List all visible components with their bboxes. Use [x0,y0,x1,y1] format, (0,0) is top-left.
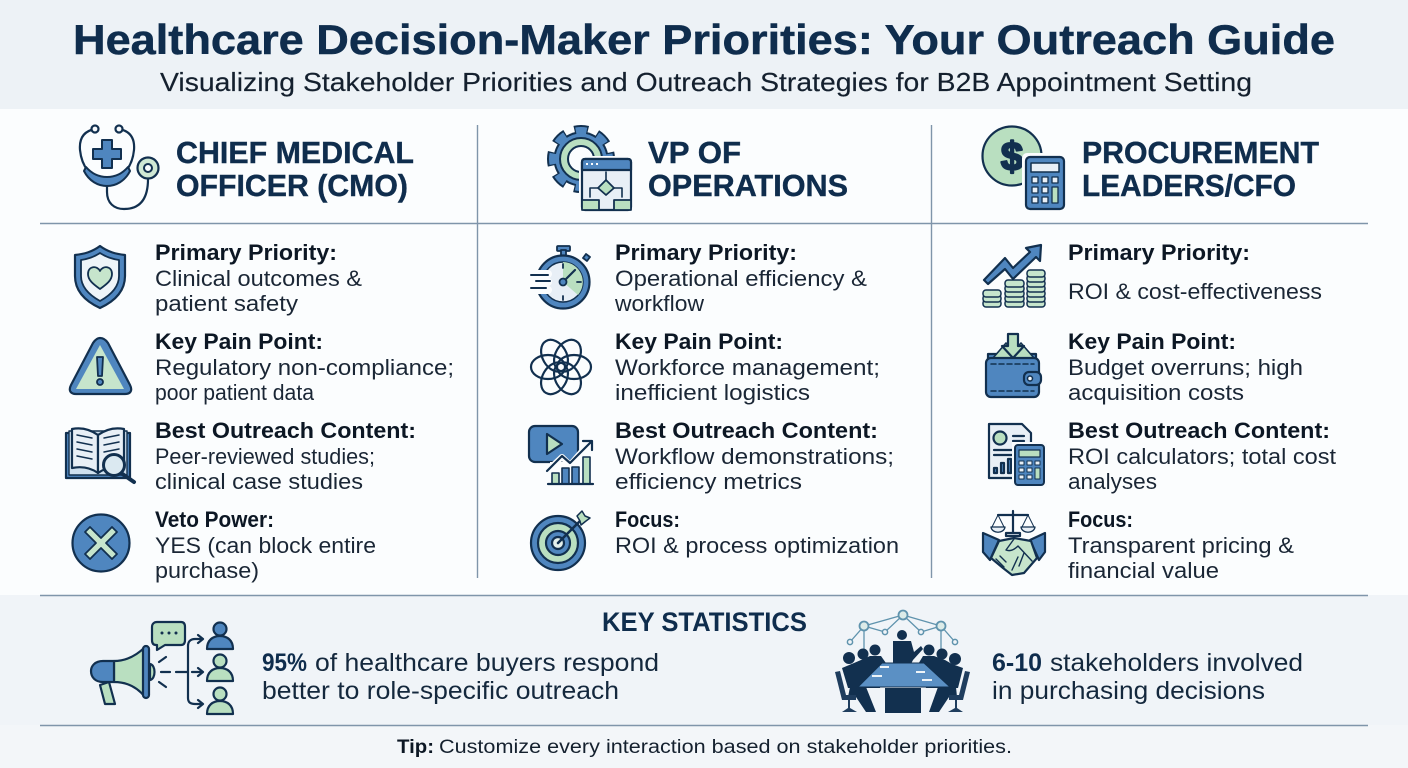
text: best outreach content [615,418,894,494]
text: key pain point: Key Pain Point: [1068,329,1236,354]
heading: procurement leaders / CFO: LEADERS/CFO [1082,168,1296,203]
stat: stakeholders: 6-10 [992,649,1042,677]
subtitle: Visualizing Stakeholder Priorities and Outreach Strategies for B2B Appointment Setting [160,67,1252,97]
panel: key statistics [91,607,1303,714]
text: key pain point: acquisition costs [1068,380,1244,405]
text: primary priority: Primary Priority: [615,240,797,265]
text: best outreach content [155,418,416,494]
text: veto power: YES (can block entire [155,533,376,558]
icon: stethoscope [80,126,158,209]
icon: boardroom meeting [835,610,970,713]
text: key pain point: Budget overruns; high [1068,355,1303,380]
stat: stakeholders: stakeholders involved [1050,649,1303,677]
icon: target [531,511,590,570]
text: primary priority: Primary Priority: [1068,240,1250,265]
icon: gear and workflow window [553,131,634,213]
text: best outreach content [1068,418,1337,494]
text: key pain point: inefficient logistics [615,380,810,405]
text: primary priority: Operational efficiency & [615,266,867,291]
tip: Customize every interaction based on stakeholder priorities. [439,737,1012,758]
text: key pain point: Regulatory non-compliance; [155,355,454,380]
heading: CMO: CHIEF MEDICAL [176,135,414,170]
icon: veto cross [72,514,130,572]
text: focus: Focus: [615,507,680,532]
icon: report and calculator [989,424,1047,488]
text: primary priority: workflow [614,291,705,316]
text: primary priority [614,240,867,316]
icon: megaphone to stakeholders [91,622,233,714]
heading: VP of Operations: VP OF [648,135,741,170]
text: key pain point: Key Pain Point: [615,329,783,354]
text: best outreach content: Peer-reviewed studies; [155,444,375,469]
text: veto power: Veto Power: [155,507,274,532]
heading: procurement leaders / CFO [1082,135,1319,203]
text: best outreach content: Best Outreach Content: [155,418,416,443]
text: best outreach content: Workflow demonstrations; [615,444,894,469]
text: key pain point [1068,329,1303,405]
icon: wallet [986,334,1041,397]
title: Healthcare Decision-Maker Priorities: Your Outreach Guide [73,16,1335,63]
text: key pain point [155,329,454,405]
header band [0,0,1408,109]
heading: procurement leaders / CFO: PROCUREMENT [1082,135,1319,170]
panel: procurement leaders [982,126,1337,583]
panel: chief medical officer [66,126,454,583]
icon: dollar and calculator: $ [1001,135,1023,179]
heading: VP of Operations [648,135,848,203]
heading: CMO: OFFICER (CMO) [176,168,408,203]
text: key pain point [615,329,880,405]
text: best outreach content: Best Outreach Content: [615,418,878,443]
text: best outreach content: efficiency metrics [615,469,802,494]
text: focus: Transparent pricing & [1068,533,1294,558]
icon: book and magnifier [66,428,134,482]
icon: interlocking rings [531,335,591,399]
text: best outreach content: ROI calculators; total cost [1068,444,1337,469]
icon: rising arrow and coins [983,245,1045,307]
icon: dollar and calculator [982,126,1069,214]
icon: video and chart [529,426,593,484]
text: primary priority: ROI & cost-effectiveness [1068,279,1322,304]
icon: warning triangle [70,338,131,394]
text: primary priority: Primary Priority: [155,240,337,265]
stat: stakeholders: in purchasing decisions [992,677,1265,705]
text: primary priority: Clinical outcomes & [155,266,362,291]
icon: stopwatch [525,246,590,308]
text: focus: ROI & process optimization [615,533,899,558]
text: key pain point: Key Pain Point: [155,329,323,354]
text: primary priority [155,240,362,316]
heading: CMO [176,135,414,203]
text: key pain point: poor patient data [155,380,314,405]
heading: key statistics: KEY STATISTICS [602,607,807,637]
text: key pain point: Workforce management; [615,355,880,380]
text: focus: Focus: [1068,507,1133,532]
stat: 95 percent [262,649,659,705]
text: focus [1068,507,1294,583]
text: best outreach content: analyses [1068,469,1157,494]
text: veto power: purchase) [155,558,259,583]
text: veto power [155,507,376,583]
stat: stakeholders [992,649,1303,705]
icon: shield heart [75,246,125,308]
stat: 95 percent: 95% [262,649,307,677]
stat: 95 percent: better to role-specific outreach [262,677,619,705]
icon: scales and handshake [983,511,1045,575]
heading: VP of Operations: OPERATIONS [648,168,848,203]
tip: Tip: [397,737,434,758]
text: focus [615,507,899,558]
text: best outreach content: clinical case studies [155,469,363,494]
text: focus: financial value [1068,558,1219,583]
text: primary priority: patient safety [155,291,299,316]
panel: vp of operations [525,131,899,570]
text: best outreach content: Best Outreach Content: [1068,418,1330,443]
stat: 95 percent: of healthcare buyers respond [315,649,659,677]
text: primary priority [1068,240,1322,304]
